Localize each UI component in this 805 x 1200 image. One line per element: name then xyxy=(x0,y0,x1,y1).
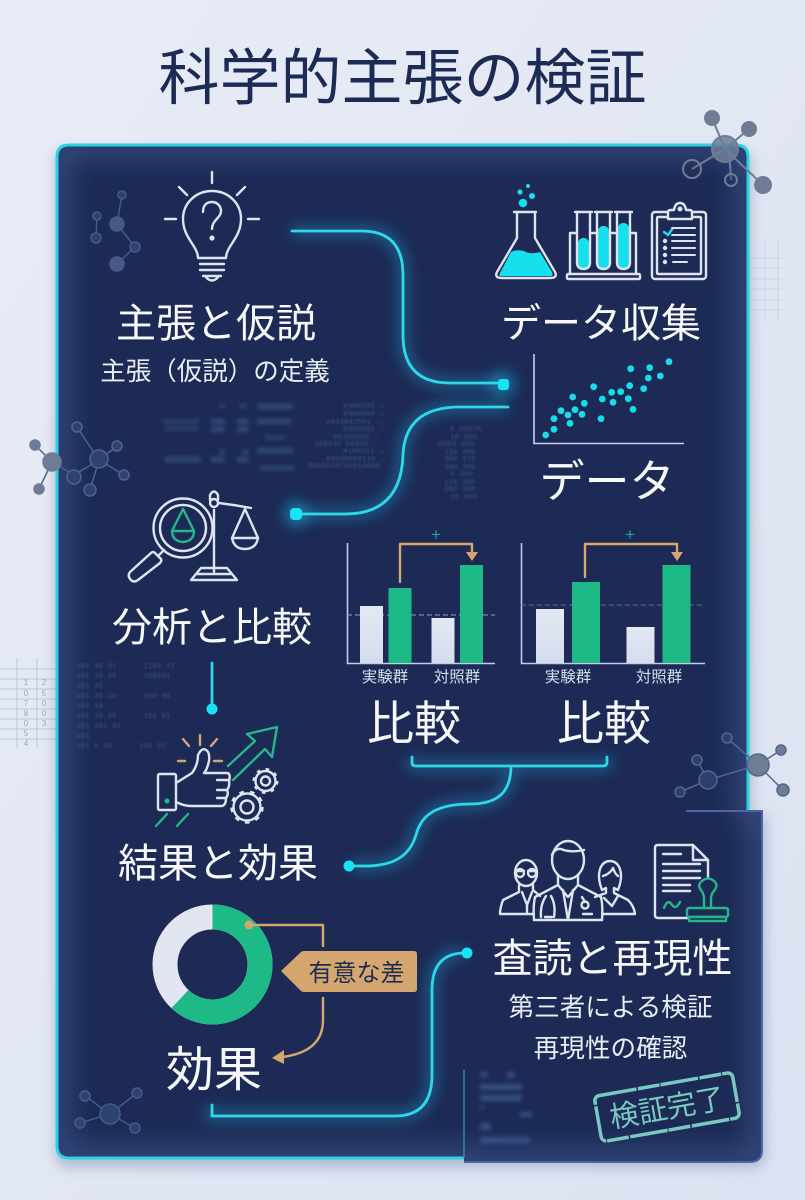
bar chart: comparison right xyxy=(521,525,705,686)
grid: left edge background: 0 xyxy=(42,709,47,718)
bar chart: comparison right: 実験群 xyxy=(545,668,591,686)
grid: right edge background xyxy=(748,238,782,322)
molecule: bottom left xyxy=(75,1088,142,1133)
grid: left edge background: 5 xyxy=(24,729,29,738)
molecule: right edge xyxy=(675,733,789,797)
bar chart: comparison left: 対照群 xyxy=(434,668,480,686)
heading: data: データ xyxy=(539,456,675,507)
callout: significant difference: 有意な差 xyxy=(308,960,404,987)
faint data text behind centre: 101 301.01 xyxy=(76,723,122,731)
icon: clipboard checklist xyxy=(652,203,706,279)
faint data text behind centre: 0003 300 xyxy=(438,441,475,449)
grid: left edge background: 4 xyxy=(24,739,29,748)
text: third-party verification: 第三者による検証 xyxy=(509,993,712,1022)
connector: comparison bracket to results xyxy=(344,757,607,872)
faint data text behind centre: 300 370 xyxy=(444,456,476,464)
icon: document with stamp xyxy=(655,845,728,921)
bar chart: comparison right: 対照群 xyxy=(636,668,682,686)
blurred notes bottom right xyxy=(480,1072,532,1143)
stamp: verification complete xyxy=(594,1072,740,1142)
title: 科学的主張の検証 xyxy=(158,44,647,112)
grid: left edge background: 0 xyxy=(24,719,29,728)
icon: reviewers xyxy=(500,841,635,920)
faint data text behind centre: 8 0007% xyxy=(450,426,482,434)
faint data text behind centre: 300 300 xyxy=(444,464,476,472)
faint data text behind centre: 101 xyxy=(76,733,90,741)
heading: claims and hypothesis: 主張と仮説 xyxy=(116,302,316,346)
grid: left edge background: 2 xyxy=(42,678,47,687)
grid: left edge background: 3 xyxy=(42,719,47,728)
callout: significant difference xyxy=(244,920,417,1064)
faint data text behind centre: 101 0.10 ···· 101.01 xyxy=(76,743,167,751)
blurred data table behind centre xyxy=(163,404,294,470)
bar chart: comparison right: + xyxy=(625,525,635,544)
heading: comparison left: 比較 xyxy=(367,697,461,750)
faint data text behind centre: #043043501 → xyxy=(326,419,381,427)
scatter chart xyxy=(534,354,684,444)
faint data text behind centre: #300000 → xyxy=(343,411,384,419)
lower right panel extension border xyxy=(464,811,762,1162)
icon: thumbs up with arrow and gears xyxy=(156,727,277,826)
text: claim definition: 主張（仮説）の定義 xyxy=(100,358,330,386)
stamp: verification complete: 検証完了 xyxy=(607,1082,727,1135)
faint data text behind centre: #300002 → xyxy=(343,426,384,434)
faint data text behind centre: 101 10 xyxy=(76,703,104,711)
molecule: upper left faint xyxy=(91,191,140,271)
faint data text behind centre: 8#96510701010000 → xyxy=(308,463,390,471)
heading: analysis and comparison: 分析と比較 xyxy=(112,606,312,650)
molecule: left edge xyxy=(30,422,129,496)
faint data text behind centre: 10 300 xyxy=(450,494,478,502)
faint data text behind centre: 130 300 xyxy=(444,449,476,457)
grid: left edge background: 0 xyxy=(24,689,29,698)
lower panel inner divider xyxy=(463,1070,465,1158)
faint data text behind centre: #100011 → xyxy=(343,448,384,456)
faint data text behind centre xyxy=(76,403,482,751)
faint data text behind centre: z00430 00300 → xyxy=(314,441,378,449)
faint data text behind centre: #0030600115 → xyxy=(326,456,385,464)
connector: data to analysis xyxy=(282,407,508,528)
grid: left edge background: 5 xyxy=(42,689,47,698)
main dark panel xyxy=(57,145,762,1162)
donut chart xyxy=(165,917,260,1012)
faint data text behind centre: 110 300 xyxy=(444,479,476,487)
heading: comparison right: 比較 xyxy=(557,697,651,750)
heading: data collection: データ収集 xyxy=(501,302,701,346)
bar chart: comparison left xyxy=(347,525,495,686)
panel shadow xyxy=(55,150,766,1168)
faint data text behind centre: #300205 → xyxy=(343,403,384,411)
grid: left edge background xyxy=(0,658,57,748)
icon: flask xyxy=(496,184,556,278)
faint data text behind centre: 101 31 xyxy=(76,683,104,691)
heading: results and effect: 結果と効果 xyxy=(118,842,318,886)
faint data text behind centre: 101 30.31 ···· 1101 31 xyxy=(76,663,176,671)
heading: effect: 効果 xyxy=(166,1044,262,1097)
text: reproducibility confirmation: 再現性の確認 xyxy=(534,1034,687,1063)
molecule: top right xyxy=(683,111,771,193)
panel cyan border xyxy=(57,145,748,1158)
icon: light bulb with question mark xyxy=(165,172,259,280)
faint data text behind centre: 0 300 xyxy=(450,471,473,479)
faint data text behind centre: 10 300 xyxy=(450,434,478,442)
grid: left edge background: 7 xyxy=(24,699,29,708)
grid: left edge background: 0 xyxy=(42,699,47,708)
icon: test tubes in rack xyxy=(567,212,640,279)
faint data text behind centre: 00300000 → xyxy=(333,434,379,442)
connector: analysis to results xyxy=(206,663,218,714)
faint data text behind centre: 101 30.30 ···· 100 00 xyxy=(76,693,171,701)
faint data text behind centre: 101 30.30 ···· 100101 xyxy=(76,673,171,681)
faint data text behind centre: 600 300 xyxy=(444,486,476,494)
connector: hypothesis to data xyxy=(292,231,517,398)
bar chart: comparison left: + xyxy=(431,525,441,544)
icon: magnifier and scales xyxy=(129,492,258,582)
connector: effect to peer review xyxy=(212,948,472,1116)
bar chart: comparison left: 実験群 xyxy=(362,668,408,686)
faint data text behind centre: 101 30.30 ···· 101 01 xyxy=(76,713,171,721)
heading: peer review and reproducibility: 査読と再現性 xyxy=(492,937,732,981)
grid: left edge background: 1 xyxy=(24,678,29,687)
grid: left edge background: 8 xyxy=(24,709,29,718)
